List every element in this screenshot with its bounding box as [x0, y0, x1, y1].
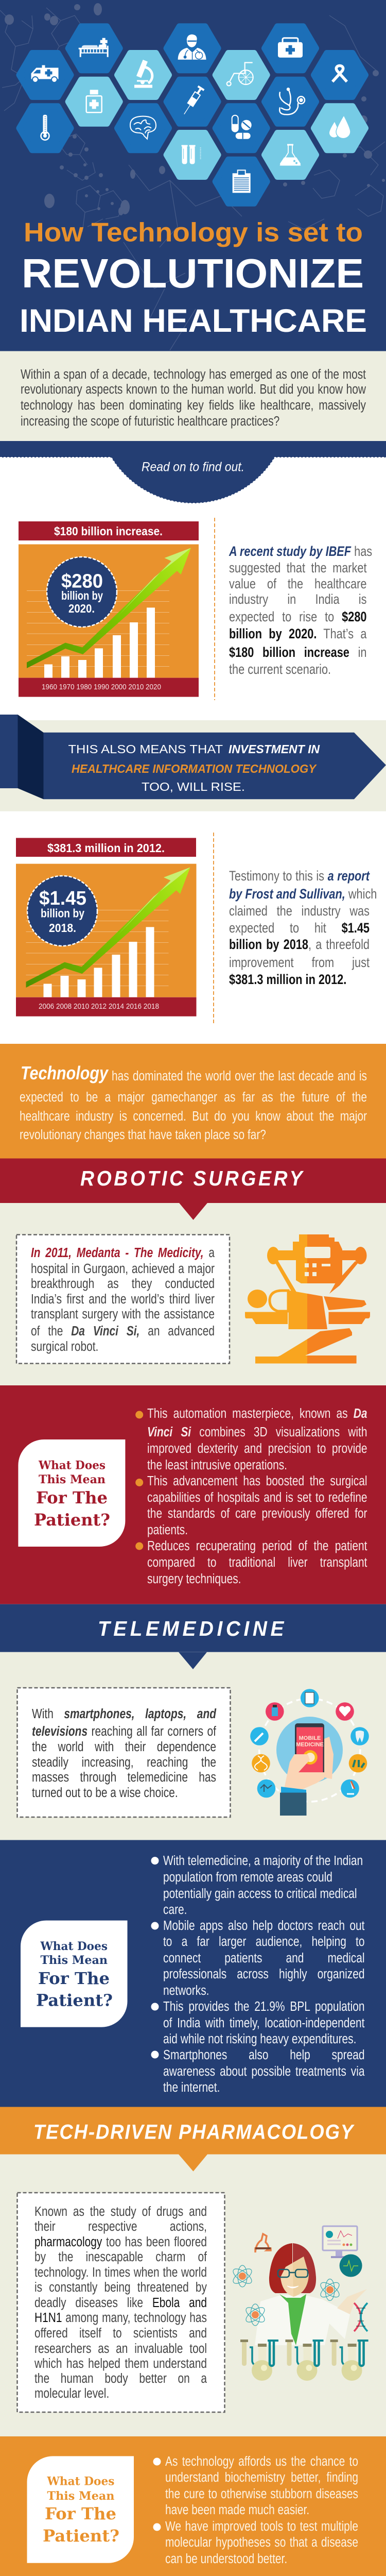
callout: what does this mean for the patient: Patient?	[43, 2526, 119, 2546]
hexagon icon grid	[20, 26, 365, 204]
text: technology statement: healthcare industry is concerned. But do you know about the major	[20, 1109, 367, 1124]
text: IBEF study: expected to rise to $280	[229, 609, 366, 624]
heading: telemedicine: TELEMEDICINE	[98, 1617, 287, 1640]
text: technology statement: revolutionary changes that have taken place so far?	[20, 1128, 266, 1142]
text: telemedicine patient bullets: care.	[163, 1903, 187, 1917]
icon: microscope	[134, 60, 152, 88]
icon: awareness ribbon	[332, 66, 347, 81]
chart: healthcare IT market growth to 2018: 2006 2008 2010 2012 2014 2016 2018	[39, 1002, 159, 1011]
callout: $280 billion by 2020	[47, 557, 117, 627]
chart: healthcare market growth to 2020	[19, 521, 199, 697]
icon: syringe	[181, 86, 204, 116]
text: robotic surgery patient bullets: improved dexterity and precision to provide	[147, 1442, 367, 1456]
panel: technology statement: Technology	[21, 1062, 109, 1083]
text: technology statement: has dominated the world over the last decade and is	[112, 1069, 367, 1083]
chart: healthcare market growth to 2020: 1960 1970 1980 1990 2000 2010 2020	[42, 683, 161, 691]
text: pharmacology patient bullets: As technology affords us the chance to	[165, 2454, 358, 2469]
text: pharmacology story: offered itself to scientists and	[34, 2326, 207, 2341]
text: telemedicine patient bullets: population from remote areas could	[163, 1870, 332, 1885]
callout: $280 billion by 2020: 2020.	[68, 602, 95, 615]
text: Medanta liver transplant: of the Da Vinci Si, an advanced	[31, 1324, 215, 1338]
text: telemedicine story	[32, 1707, 216, 1800]
text: pharmacology story: is constantly being threatened by	[34, 2280, 207, 2295]
icon: robotic surgery	[245, 1234, 370, 1363]
text: robotic surgery patient bullets: surgery techniques.	[147, 1572, 241, 1586]
text: telemedicine patient bullets: aid while not risking heavy expenditures.	[163, 2032, 356, 2046]
callout: $1.45 billion by 2018	[27, 876, 97, 946]
text: telemedicine patient bullets: networks.	[163, 1984, 209, 1998]
icon: thermometer	[41, 115, 49, 140]
callout: what does this mean for the patient: What Does	[47, 2475, 114, 2488]
panel: telemedicine story background	[0, 1652, 386, 1840]
chart heading: $180 billion increase.	[54, 524, 163, 538]
text: telemedicine patient bullets: awareness about possible treatments via	[163, 2064, 364, 2079]
icon: mobile medicine	[250, 1689, 369, 1816]
panel: robotic surgery patient meaning	[0, 1385, 386, 1604]
panel: telemedicine text box	[17, 1688, 231, 1817]
text: pharmacology patient bullets: the cure to otherwise stubborn diseases	[165, 2487, 358, 2501]
text: pharmacology story: deadly diseases like Ebola and	[34, 2296, 207, 2310]
text: pharmacology patient bullets: molecular hypotheses so that a disease	[165, 2535, 358, 2550]
text: pharmacology story: by the inescapable charm of	[34, 2250, 207, 2264]
text: telemedicine story: turned out to be a wise choice.	[32, 1786, 178, 1800]
icon: medicine bottle	[86, 90, 102, 112]
text: Frost and Sullivan report: billion by 2018, a threefold	[229, 937, 370, 952]
callout: what does this mean for the patient: Patient?	[36, 1991, 113, 2010]
panel: robotic surgery story background	[0, 1203, 386, 1385]
text: telemedicine story: With smartphones, laptops, and	[32, 1707, 216, 1721]
text: pharmacology story: molecular level.	[34, 2386, 109, 2401]
callout: what does this mean for the patient	[21, 1921, 128, 2027]
text: telemedicine story: masses through telemedicine has	[32, 1770, 216, 1785]
heading: robotic surgery	[0, 1158, 386, 1220]
text: pharmacology story: technology. In times when the world	[34, 2265, 207, 2280]
panel: investment banner: TOO, WILL RISE.	[142, 780, 245, 793]
icon: brain	[130, 116, 156, 139]
panel: investment banner: INVESTMENT IN	[229, 742, 320, 756]
text: IBEF study: industry in India is	[229, 591, 366, 607]
text: robotic surgery patient bullets: patients.	[147, 1523, 188, 1537]
callout: what does this mean for the patient: Patient?	[34, 1510, 110, 1530]
text: pharmacology story: researchers as an invaluable tool	[34, 2341, 207, 2355]
callout: what does this mean for the patient: What Does	[40, 1940, 108, 1953]
text: telemedicine patient bullets: With telemedicine, a majority of the Indian	[163, 1854, 363, 1868]
panel: read on half circle: Read on to find out.	[142, 460, 244, 474]
text: pharmacology patient bullets: can be understood better.	[165, 2552, 287, 2566]
panel: telemedicine patient meaning	[0, 1840, 386, 2107]
text: robotic surgery patient bullets: compared to traditional liver transplant	[147, 1555, 367, 1570]
callout: what does this mean for the patient: For The	[36, 1488, 108, 1507]
text: pharmacology story: the human body better on a	[34, 2371, 207, 2386]
text: Frost and Sullivan report	[229, 868, 377, 987]
text: telemedicine patient bullets: Smartphones also help spread	[163, 2048, 364, 2062]
text: IBEF study: billion by 2020. That’s a	[229, 626, 366, 641]
callout: what does this mean for the patient: This Mean	[47, 2489, 114, 2503]
callout: what does this mean for the patient: This Mean	[39, 1473, 106, 1486]
text: pharmacology patient bullets: understand biochemistry better, finding	[165, 2470, 358, 2485]
text: Medanta liver transplant: surgical robot.	[31, 1340, 98, 1354]
text: pharmacology story: their respective actions,	[34, 2219, 207, 2234]
text: telemedicine story: televisions reaching all far corners of	[32, 1724, 216, 1739]
icon: hospital bed	[79, 38, 109, 57]
text: technology statement: expected to be a major gamechanger as far as the future of the	[20, 1090, 367, 1105]
text: Medanta liver transplant: hospital in Gurgaon, achieved a major	[31, 1262, 215, 1276]
text: robotic surgery patient bullets: Vinci Si combines 3D visualizations with	[147, 1425, 367, 1439]
heading: tech-driven pharmacology	[0, 2107, 386, 2155]
chart heading: $381.3 million in 2012.	[47, 841, 165, 855]
text: Frost and Sullivan report: Testimony to this is a report	[229, 868, 370, 884]
text: robotic surgery patient bullets: capabilities of hospitals and is set to redefine	[147, 1490, 367, 1505]
icon: test tubes	[182, 145, 201, 164]
text: intro paragraph: technology has been dominating key fields like healthcare, massively	[21, 398, 366, 412]
text: telemedicine patient bullets: connect patients and medical	[163, 1951, 364, 1965]
text: robotic surgery patient bullets	[147, 1406, 367, 1586]
title: how technology is set to revolutionize: How Technology is set to	[24, 217, 363, 247]
panel: technology statement	[0, 1044, 386, 1158]
callout: what does this mean for the patient: What Does	[38, 1459, 106, 1472]
callout: what does this mean for the patient: For The	[38, 1969, 110, 1988]
text: telemedicine patient bullets: professionals across highly organized	[163, 1967, 364, 1981]
icon: ambulance	[31, 65, 59, 82]
callout: $280 billion by 2020: billion by	[61, 589, 103, 602]
icon: first aid kit	[278, 38, 303, 58]
title: how technology is set to revolutionize	[20, 217, 367, 339]
icon: doctor	[178, 35, 206, 60]
icon: scientist in a lab	[231, 2226, 369, 2381]
callout: what does this mean for the patient	[27, 2456, 134, 2563]
callout: what does this mean for the patient	[18, 1439, 125, 1547]
panel: investment banner	[0, 715, 386, 811]
callout: $280 billion by 2020: $280	[61, 571, 103, 592]
text: telemedicine patient bullets: to a far larger audience, helping to	[163, 1935, 364, 1949]
icon: clipboard	[233, 170, 251, 193]
text: Frost and Sullivan report: expected to hit $1.45	[229, 920, 370, 936]
text: Frost and Sullivan report: claimed the industry was	[229, 903, 370, 919]
title: how technology is set to revolutionize: INDIAN HEALTHCARE	[20, 303, 367, 339]
text: pharmacology story	[34, 2205, 207, 2401]
text: Frost and Sullivan report: improvement from just	[229, 955, 370, 970]
icon: wheelchair	[227, 63, 253, 86]
text: pharmacology story: which has helped them understand	[34, 2357, 207, 2371]
text: pharmacology patient bullets: have been made much easier.	[165, 2503, 309, 2517]
text: telemedicine patient bullets: potentially gain access to critical medical	[163, 1887, 357, 1901]
text: intro paragraph: increasing the scope of futuristic healthcare practices?	[21, 414, 279, 429]
callout: what does this mean for the patient: For The	[45, 2504, 116, 2523]
callout: what does this mean for the patient: This Mean	[40, 1954, 108, 1967]
text: telemedicine patient bullets: Mobile apps also help doctors reach out	[163, 1919, 364, 1933]
icon: flask	[280, 144, 301, 166]
text: Medanta liver transplant: In 2011, Medanta - The Medicity, a	[31, 1246, 215, 1260]
panel: pharmacology story background	[0, 2155, 386, 2436]
panel: investment banner: THIS ALSO MEANS THAT	[68, 742, 223, 756]
text: robotic surgery patient bullets: This automation masterpiece, known as Da	[147, 1406, 367, 1421]
icon: pills	[232, 115, 252, 139]
panel: header background	[0, 0, 386, 351]
text: intro paragraph	[21, 367, 366, 429]
text: robotic surgery patient bullets: This advancement has boosted the surgical	[147, 1474, 367, 1488]
icon: mobile medicine: MEDICINE	[296, 1741, 324, 1748]
text: pharmacology story: pharmacology too has been floored	[34, 2235, 207, 2249]
text: telemedicine story: the world with their dependence	[32, 1740, 216, 1754]
panel: pharmacology text box	[17, 2193, 224, 2412]
panel: pharmacology patient meaning	[0, 2436, 386, 2576]
callout: $1.45 billion by 2018: 2018.	[49, 921, 76, 935]
text: Medanta liver transplant	[31, 1246, 215, 1354]
panel: robotic surgery text box	[16, 1234, 230, 1363]
text: pharmacology story: Known as the study of drugs and	[34, 2205, 207, 2219]
text: robotic surgery patient bullets: Reduces recuperating period of the patient	[147, 1539, 367, 1553]
text: IBEF study: suggested that the market	[229, 560, 366, 575]
text: Medanta liver transplant: India’s first and the world’s third liver	[31, 1292, 215, 1307]
text: IBEF study: A recent study by IBEF has	[229, 544, 372, 559]
text: robotic surgery patient bullets: the standards of care previously offered for	[147, 1506, 367, 1521]
text: telemedicine patient bullets: This provides the 21.9% BPL population	[163, 1999, 364, 2014]
panel: investment banner: HEALTHCARE INFORMATION TECHNOLOGY	[72, 762, 318, 775]
text: intro paragraph: revolutionary aspects known to the human world. But did you know how	[21, 382, 366, 397]
heading: tech-driven pharmacology: TECH-DRIVEN PHARMACOLOGY	[33, 2121, 355, 2144]
text: Frost and Sullivan report: $381.3 million in 2012.	[229, 972, 346, 987]
panel: intro background	[0, 351, 386, 441]
text: pharmacology patient bullets	[165, 2454, 358, 2566]
icon: mobile medicine: MOBILE	[299, 1735, 321, 1741]
callout: $1.45 billion by 2018: billion by	[41, 907, 84, 920]
text: telemedicine patient bullets	[163, 1854, 364, 2095]
chart: healthcare IT market growth to 2018	[16, 838, 197, 1016]
text: telemedicine patient bullets: the internet.	[163, 2080, 220, 2095]
title: how technology is set to revolutionize: REVOLUTIONIZE	[22, 250, 364, 296]
callout: $1.45 billion by 2018: $1.45	[39, 888, 86, 909]
text: Frost and Sullivan report: by Frost and Sullivan, which	[229, 886, 377, 902]
chart heading	[19, 521, 199, 540]
text: IBEF study: value of the healthcare	[229, 576, 366, 591]
text: telemedicine patient bullets: of India with timely, location-independent	[163, 2016, 364, 2030]
icon: blood drops	[329, 115, 350, 139]
text: IBEF study: $180 billion increase in	[229, 645, 366, 660]
panel: read on half circle	[0, 441, 386, 503]
text: Medanta liver transplant: transplant surgery with the assistance	[31, 1307, 215, 1321]
icon: stethoscope	[279, 88, 305, 114]
chart heading	[16, 838, 196, 857]
text: pharmacology story: H1N1 among many, technology has	[34, 2311, 207, 2325]
text: technology statement	[20, 1069, 367, 1142]
text: IBEF study: the current scenario.	[229, 662, 331, 677]
text: robotic surgery patient bullets: the least intrusive operations.	[147, 1458, 287, 1472]
text: telemedicine story: steadily increasing, reaching the	[32, 1755, 216, 1770]
text: IBEF study	[229, 544, 372, 677]
heading: telemedicine	[0, 1604, 386, 1652]
text: Medanta liver transplant: breakthrough as they conducted	[31, 1277, 215, 1291]
text: pharmacology patient bullets: We have improved tools to test multiple	[165, 2519, 358, 2534]
heading: robotic surgery: ROBOTIC SURGERY	[80, 1166, 305, 1190]
text: intro paragraph: Within a span of a decade, technology has emerged as one of the most	[21, 367, 366, 382]
